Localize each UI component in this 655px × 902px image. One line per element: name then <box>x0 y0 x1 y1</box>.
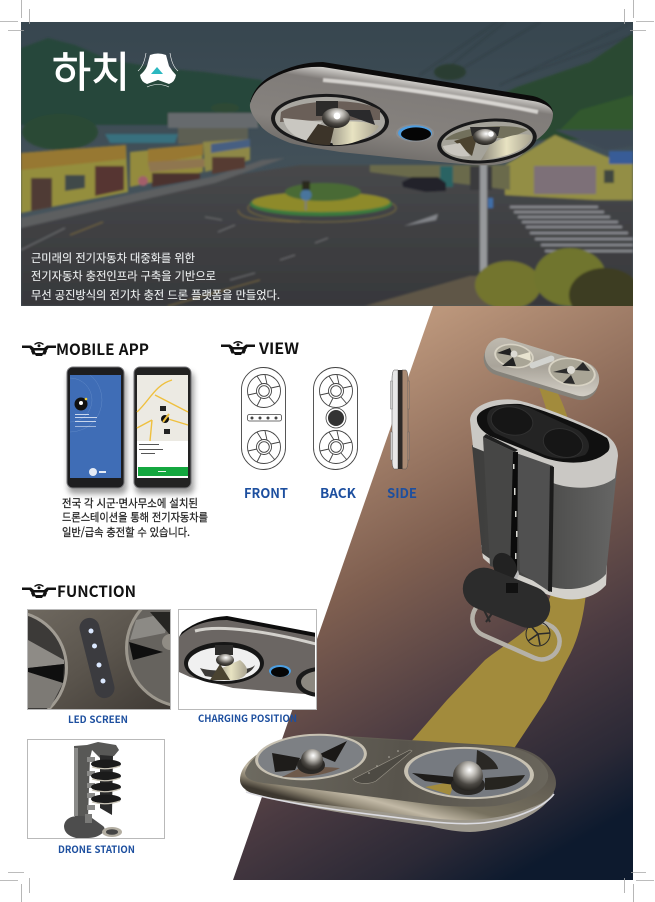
app description: 일반/급속 충전할 수 있습니다. <box>62 524 190 540</box>
panel: LED screen: LED SCREEN <box>68 712 128 726</box>
heading: function: FUNCTION <box>57 580 136 602</box>
app description: 전국 각 시군·면사무소에 설치된 <box>62 495 198 511</box>
hero description: 근미래의 전기자동차 대중화를 위한 <box>31 250 195 266</box>
hero photo panel <box>21 22 641 322</box>
top cover <box>479 333 603 404</box>
hero description: 무선 공진방식의 전기차 충전 드론 플랫폼을 만들었다. <box>31 287 280 303</box>
hero description <box>31 250 280 303</box>
view: front: FRONT <box>244 482 289 502</box>
station render <box>64 742 122 838</box>
light pole <box>480 160 487 275</box>
phone: splash screen <box>64 366 130 498</box>
heading: view: VIEW <box>258 337 299 359</box>
right fan <box>403 745 535 801</box>
canister lower ring <box>481 545 607 599</box>
curb and bushes <box>367 275 490 306</box>
right fan <box>125 610 170 706</box>
phone: map screen <box>134 367 194 494</box>
touch bar <box>353 750 412 783</box>
large drone render <box>240 730 556 832</box>
hero drone render <box>250 62 553 168</box>
left fan <box>28 613 68 709</box>
sliding panels <box>483 434 554 592</box>
parked car <box>402 177 446 192</box>
top face <box>245 736 548 807</box>
view: back: BACK <box>320 482 357 502</box>
phone mockups <box>64 366 198 498</box>
bottom lid <box>456 549 557 634</box>
bright seam <box>246 792 554 824</box>
heading: mobile app: MOBILE APP <box>56 338 149 360</box>
road dashes <box>21 217 328 280</box>
panel: charging position: CHARGING POSITION <box>198 711 297 725</box>
panel: LED screen <box>27 609 171 723</box>
crosswalk <box>510 207 633 251</box>
right yellow shop <box>505 135 633 200</box>
canister top ring <box>470 399 618 488</box>
LED strip <box>80 618 114 698</box>
lower rotor frame <box>467 595 565 665</box>
hero description: 전기자동차 충전인프라 구축을 기반으로 <box>31 268 216 284</box>
panel: drone station <box>28 740 164 856</box>
title: 하치: 하치 <box>52 39 130 100</box>
canister body <box>472 445 617 589</box>
diagonal gradient backdrop <box>233 306 633 880</box>
top shell <box>240 735 556 820</box>
charging hole with blue ring <box>396 124 434 142</box>
power lines <box>516 70 534 78</box>
app description <box>62 495 208 540</box>
roundabout <box>246 202 398 224</box>
road surface <box>21 165 633 306</box>
sidewalk <box>21 158 285 228</box>
view: back <box>314 368 358 502</box>
right mountain <box>500 33 633 140</box>
view: side <box>387 370 417 502</box>
panel: charging position <box>178 609 317 722</box>
hull underside <box>245 790 554 832</box>
app description: 드론스테이션을 통해 전기자동차를 <box>62 509 208 525</box>
heading: function <box>22 580 136 602</box>
distant buildings <box>168 113 258 128</box>
yellow shops <box>21 145 128 213</box>
stored discs <box>487 404 589 462</box>
right fan well <box>435 114 539 168</box>
panel: drone station: DRONE STATION <box>58 842 135 856</box>
heading: view <box>221 337 299 359</box>
left fan <box>254 730 368 784</box>
exploded view drone <box>456 333 618 665</box>
view: side: SIDE <box>387 482 417 502</box>
left fan well <box>270 92 390 148</box>
logo mark <box>138 53 178 87</box>
fan well <box>184 642 264 684</box>
view: front <box>242 368 289 502</box>
trees <box>434 64 466 80</box>
left mountain <box>21 38 262 125</box>
charge port <box>269 665 291 677</box>
yellow road ribbon <box>412 388 586 748</box>
canister opening <box>477 404 610 463</box>
